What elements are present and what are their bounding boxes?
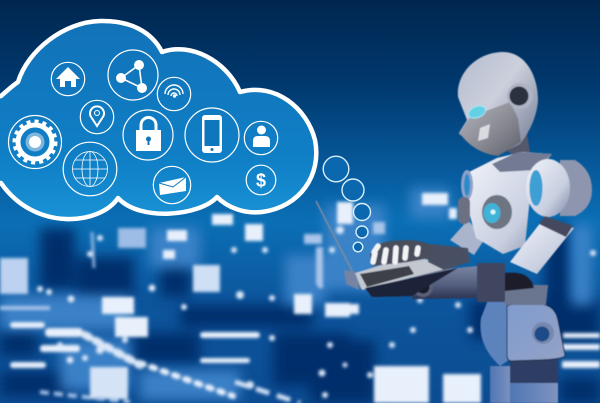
icon: person: [244, 121, 278, 155]
robot: far arm: [450, 220, 484, 255]
icon: house: [51, 62, 85, 96]
robot: glowing eye: [467, 104, 487, 120]
robot: hand on keyboard: [370, 240, 470, 270]
robot: laptop: [316, 201, 458, 297]
robot: chest core: [482, 195, 512, 229]
icon: dollar sign: $: [256, 170, 266, 190]
robot: head: [458, 52, 538, 156]
icon: dollar sign: [246, 165, 276, 195]
icon: smartphone: [185, 108, 239, 162]
icon: envelope: [153, 166, 191, 204]
robot: legs: [490, 358, 558, 403]
icon: wifi signal: [157, 77, 191, 111]
icon: padlock: [123, 110, 173, 160]
robot: waist: [502, 285, 548, 305]
cloud panel: [0, 21, 316, 219]
robot: forearm: [412, 263, 534, 302]
icon: gear: [8, 116, 62, 168]
icon: location pin: [80, 100, 114, 134]
robot: shoulder: [526, 159, 592, 217]
robot: neck: [506, 128, 530, 160]
icon: globe: [63, 142, 117, 196]
robot: upper arm: [510, 216, 574, 274]
robot: torso: [458, 152, 552, 254]
robot: [316, 52, 592, 403]
icon: share network: [108, 50, 158, 100]
robot: hips: [480, 300, 565, 366]
laptop-to-cloud thought bubbles: [323, 156, 370, 252]
background: blurred city lights: [0, 188, 600, 403]
cloud icons: [8, 50, 278, 204]
